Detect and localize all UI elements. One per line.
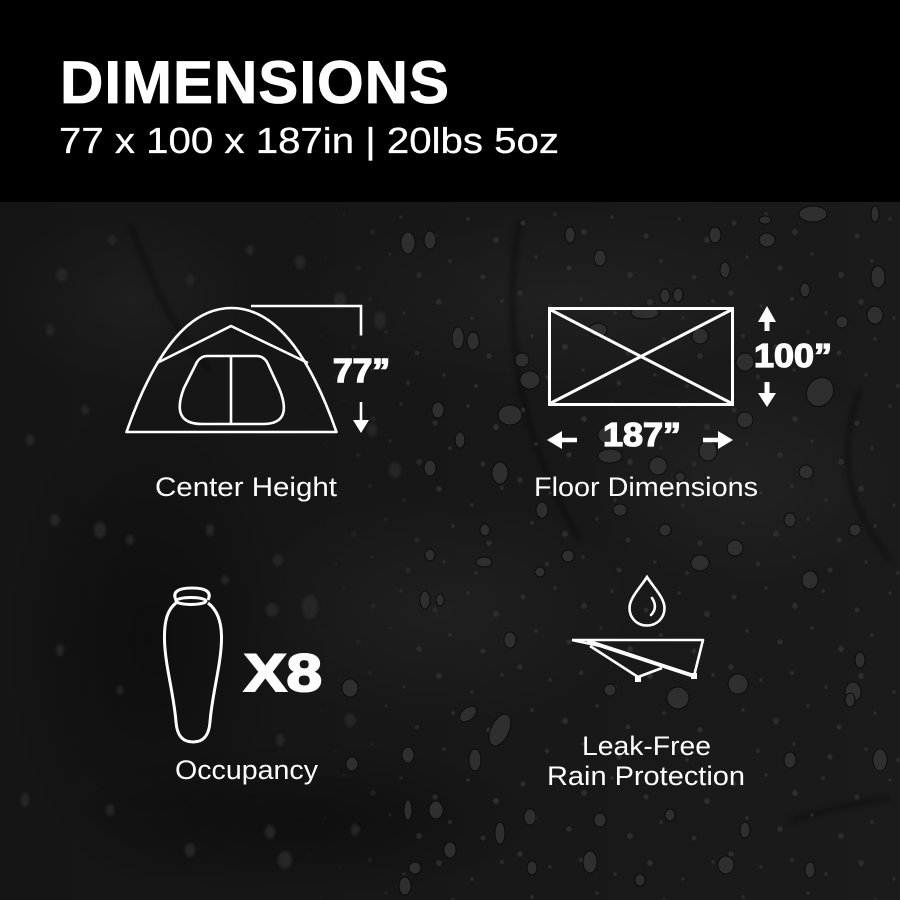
left and right arrows	[547, 431, 733, 449]
value: times 8: X8	[244, 644, 322, 703]
panel: occupancy	[164, 588, 322, 785]
panel: floor dimensions	[534, 306, 832, 502]
label: occupancy: Occupancy	[175, 755, 319, 785]
label: floor dimensions: Floor Dimensions	[534, 472, 758, 502]
up and down arrows	[758, 306, 776, 407]
panel: rain protection	[547, 577, 745, 791]
label: leak-free rain protection	[547, 731, 745, 791]
subtitle: 77 x 100 x 187in | 20lbs 5oz	[59, 120, 559, 161]
title: DIMENSIONS	[60, 49, 449, 116]
label: center height: Center Height	[155, 472, 338, 502]
height bracket and arrow	[251, 306, 369, 433]
panel: center height	[126, 306, 390, 502]
icon: rain fly tarp	[572, 640, 703, 682]
value: 77 inches: 77”	[333, 352, 390, 389]
blurred droplets, left side	[21, 235, 401, 869]
icon: tent	[126, 308, 336, 432]
value: 187 inches: 187”	[603, 416, 681, 453]
label: leak-free rain protection: Leak-Free	[582, 731, 711, 761]
icon: floor plan	[550, 308, 732, 404]
value: 100 inches: 100”	[754, 337, 832, 374]
sharp droplets, right side	[342, 206, 887, 895]
background: wet fabric	[0, 202, 900, 900]
icon: water drop	[630, 577, 664, 626]
header band	[0, 0, 900, 202]
icon: sleeping bag	[164, 588, 222, 742]
label: leak-free rain protection: Rain Protection	[547, 761, 745, 791]
